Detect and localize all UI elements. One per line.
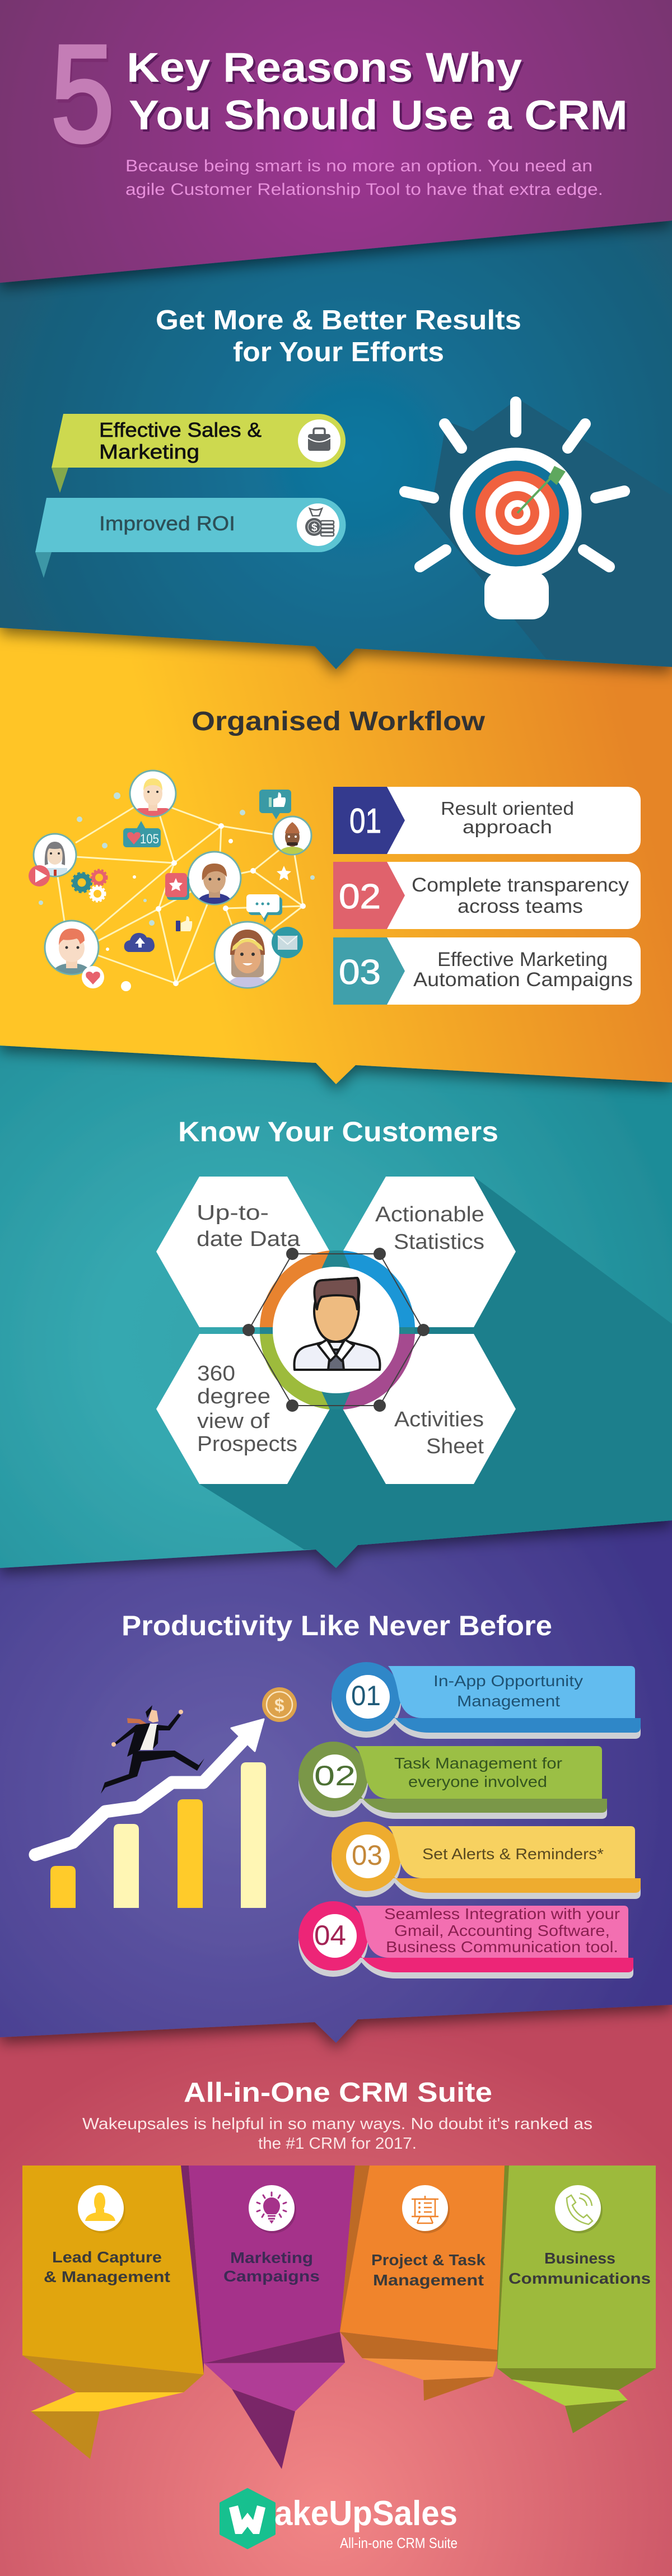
icon: thumb <box>176 916 192 931</box>
pill 03 <box>332 1822 641 1899</box>
banner label: Campaigns <box>223 2267 320 2285</box>
banner: business communications <box>497 2166 656 2433</box>
subtitle: Because being smart is no more an option. You need an <box>125 157 592 175</box>
hexagon: actionable statistics <box>343 1177 516 1327</box>
pill 04 label: Seamless Integration with your <box>384 1905 620 1922</box>
hexagon: 360 degree view: view of <box>197 1410 269 1433</box>
heading: productivity: Productivity Like Never Before <box>122 1610 552 1641</box>
title: You Should Use a CRM <box>129 92 628 138</box>
heading: results <box>156 305 521 367</box>
icon: mail <box>272 927 303 958</box>
row 03: 03 <box>339 953 381 992</box>
icon: presentation board <box>402 2185 450 2233</box>
hexagon: 360 degree view: 360 <box>197 1362 235 1385</box>
ribbon label: Improved ROI <box>99 512 235 535</box>
badge: 105 likes <box>123 821 161 847</box>
person: blond <box>130 771 176 819</box>
pill 04 <box>298 1901 633 1978</box>
pill 04 label: Gmail, Accounting Software, <box>394 1922 610 1939</box>
pill 03 label: 03 <box>352 1840 382 1871</box>
pill 02 label: 02 <box>314 1760 356 1791</box>
icon: idea bulb <box>249 2185 296 2233</box>
icon: play <box>29 865 50 886</box>
hexagon: activities sheet <box>343 1334 516 1484</box>
icon: gears <box>72 870 107 902</box>
logo: WakeUpSales: All-in-one CRM Suite <box>340 2535 458 2551</box>
pill 01 <box>332 1662 641 1739</box>
pill 01 label: 01 <box>351 1680 381 1711</box>
row 02: 02 <box>339 878 381 916</box>
ribbon: effective sales <box>52 414 346 493</box>
ribbon label <box>99 418 262 463</box>
ribbon: improved ROI <box>35 498 346 578</box>
banner label: Communications <box>508 2270 651 2287</box>
subtitle: agile Customer Relationship Tool to have that extra edge. <box>125 180 603 199</box>
banner: marketing campaigns <box>181 2166 355 2469</box>
row 03 <box>333 937 641 1005</box>
bubble: chat <box>246 894 282 922</box>
icon: coin: $ <box>274 1695 284 1715</box>
pill 02 <box>298 1742 607 1819</box>
panel: results <box>35 305 672 666</box>
icon: star <box>277 866 291 880</box>
logo: WakeUpSales: akeUpSales <box>274 2494 458 2533</box>
badge: thumbs up bubble <box>259 790 291 819</box>
row text <box>413 949 633 991</box>
banner label: Lead Capture <box>52 2248 162 2266</box>
row text: Result oriented <box>441 798 574 819</box>
network illustration <box>29 771 315 998</box>
icon: heart <box>82 966 104 988</box>
person: brown hair <box>188 852 241 911</box>
hexagon: 360 degree view: degree <box>197 1385 270 1408</box>
pill 02 label <box>314 1754 562 1791</box>
banner label <box>44 2248 170 2285</box>
ribbon label: Effective Sales & <box>99 418 262 441</box>
banner: project and task <box>340 2166 505 2401</box>
title: You Should Use a CRM <box>131 94 630 141</box>
pill 02 label: Task Management for <box>394 1754 562 1772</box>
subtitle <box>125 157 603 199</box>
pill 04 label <box>314 1905 620 1956</box>
person: red hair <box>45 921 99 983</box>
person: glasses <box>273 816 311 860</box>
row text: across teams <box>458 895 583 917</box>
icon: cloud upload <box>124 933 155 952</box>
panel: all-in-one CRM suite <box>22 2078 656 2551</box>
icon: money bag <box>305 508 334 536</box>
hexagon: actionable statistics: Actionable <box>375 1203 484 1226</box>
row text: Automation Campaigns <box>413 969 633 991</box>
pill 01 label <box>351 1672 583 1711</box>
row 01 <box>333 787 641 854</box>
row 01: 01 <box>349 802 381 841</box>
pill 02 label: everyone involved <box>408 1773 547 1790</box>
banner label <box>508 2250 651 2287</box>
hexagon: up-to-date data: date Data <box>197 1228 301 1251</box>
title: Key Reasons Why <box>127 44 522 91</box>
pill 03 label: Set Alerts & Reminders* <box>422 1845 604 1863</box>
pill 01 label: In-App Opportunity <box>433 1672 583 1690</box>
arrow <box>35 1719 264 1855</box>
hexagon long shadow <box>199 1177 672 1568</box>
icon: briefcase <box>308 428 330 451</box>
growth chart <box>35 1687 297 1908</box>
row text: approach <box>463 816 552 837</box>
title <box>127 44 630 141</box>
banner label: Marketing <box>230 2249 313 2266</box>
icon: light bulb with target <box>405 402 624 619</box>
hexagon: actionable statistics: Statistics <box>394 1230 484 1254</box>
panel: header <box>51 17 630 199</box>
row text: Complete transparency <box>412 874 629 896</box>
row text <box>441 798 574 837</box>
intro text: the #1 CRM for 2017. <box>258 2135 417 2153</box>
hexagon: 360 degree view: Prospects <box>197 1432 297 1456</box>
central ring and person <box>242 1248 430 1412</box>
pill 04 label: 04 <box>314 1920 346 1951</box>
banner label <box>371 2251 486 2289</box>
icon: customer avatar <box>294 1278 380 1370</box>
pill 01 label: Management <box>457 1692 560 1710</box>
illustration: running businessman <box>101 1705 204 1794</box>
icon: money bag: $ <box>311 522 318 534</box>
ribbon label: Marketing <box>99 440 199 463</box>
heading: suite: All-in-One CRM Suite <box>184 2078 492 2108</box>
person: grey hair <box>34 834 76 879</box>
icon: coin <box>262 1687 297 1722</box>
title: Key Reasons Why <box>129 46 524 93</box>
hexagon: activities sheet: Sheet <box>426 1435 484 1458</box>
heading: workflow: Organised Workflow <box>192 707 486 736</box>
hexagon: activities sheet: Activities <box>394 1408 484 1431</box>
hexagon: 360 degree view <box>156 1334 330 1484</box>
banner label: & Management <box>44 2268 170 2285</box>
heading: results: Get More & Better Results <box>156 305 521 335</box>
bulb long shadow <box>419 399 672 666</box>
row text <box>412 874 629 917</box>
intro text: Wakeupsales is helpful in so many ways. No doubt it's ranked as <box>82 2115 592 2133</box>
row text: Effective Marketing <box>437 949 608 970</box>
banner label: Business <box>544 2250 615 2267</box>
icon: person <box>78 2185 125 2233</box>
intro text <box>82 2115 592 2153</box>
big number 5: 5 <box>53 20 116 174</box>
badge: 105 likes: 105 <box>140 832 159 847</box>
panel: know your customers <box>156 1116 672 1568</box>
banner label: Project & Task <box>371 2251 486 2269</box>
logo: WakeUpSales <box>221 2489 458 2551</box>
banner label: Management <box>373 2271 484 2289</box>
heading: customers: Know Your Customers <box>178 1116 498 1147</box>
panel: productivity <box>35 1610 641 1978</box>
row 02 <box>333 862 641 929</box>
pill 04 label: Business Communication tool. <box>386 1938 618 1956</box>
person: headband <box>214 922 281 998</box>
pill 03 label <box>352 1840 604 1871</box>
badge: star <box>165 873 189 900</box>
heading: results: for Your Efforts <box>233 337 444 367</box>
banner label <box>223 2249 320 2285</box>
hexagon: up-to-date data <box>156 1177 330 1327</box>
hexagon: up-to-date data: Up-to- <box>197 1201 269 1225</box>
icon: phone <box>555 2185 603 2233</box>
panel: organised workflow <box>29 707 641 1005</box>
big number 5: 5 <box>51 17 114 171</box>
banner: lead capture <box>22 2166 204 2459</box>
